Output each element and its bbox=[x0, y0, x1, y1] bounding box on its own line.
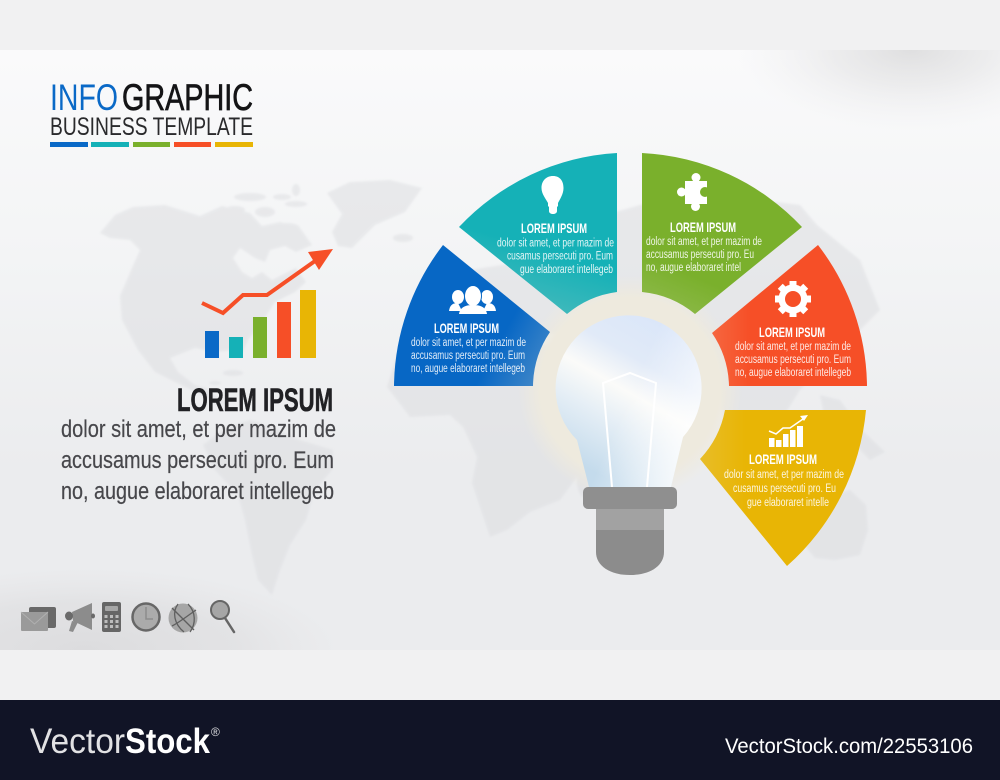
text: dolor sit amet, et per mazim de bbox=[497, 238, 614, 250]
heading: LOREM IPSUM bbox=[521, 220, 587, 236]
icon: clock bbox=[132, 604, 160, 630]
footer logo bbox=[30, 722, 220, 761]
text: no, augue elaboraret intellegeb bbox=[735, 367, 851, 379]
title word: INFOGRAPHIC: INFO bbox=[50, 77, 118, 118]
central light bulb bbox=[556, 315, 702, 575]
footer logo: ® bbox=[211, 725, 220, 739]
text: dolor sit amet, et per mazim de bbox=[646, 236, 762, 248]
text bbox=[497, 238, 614, 276]
footer logo: Vector bbox=[30, 722, 125, 761]
text bbox=[724, 469, 844, 509]
left text block: accusamus persecuti pro. Eum bbox=[61, 447, 334, 474]
text bbox=[411, 337, 526, 375]
footer logo: Stock bbox=[125, 722, 210, 761]
bulb base bbox=[583, 487, 677, 575]
text: accusamus persecuti pro. Eu bbox=[646, 249, 754, 261]
left text block: no, augue elaboraret intellegeb bbox=[61, 478, 334, 505]
filament bbox=[603, 373, 656, 487]
title word: INFOGRAPHIC bbox=[50, 77, 253, 118]
text: no, augue elaboraret intel bbox=[646, 262, 741, 274]
heading: LOREM IPSUM bbox=[434, 320, 499, 336]
bar chart with rising arrow bbox=[202, 249, 333, 358]
colour bars bbox=[50, 142, 253, 147]
bulb glow halo bbox=[518, 276, 742, 500]
icon: calculator bbox=[102, 602, 121, 632]
icon: megaphone bbox=[65, 603, 95, 632]
icon: magnifier bbox=[211, 601, 234, 632]
text: gue elaboraret intellegeb bbox=[520, 264, 613, 276]
icon: globe bbox=[168, 604, 198, 632]
left heading: LOREM IPSUM bbox=[177, 382, 333, 418]
world map bbox=[100, 180, 885, 595]
icon: envelopes bbox=[21, 607, 56, 631]
icon: growth chart bbox=[769, 415, 808, 447]
text: cusamus persecuti pro. Eum bbox=[507, 250, 613, 262]
left text block bbox=[61, 416, 336, 505]
icon: gear bbox=[775, 281, 811, 317]
text bbox=[735, 341, 851, 379]
icon: people bbox=[449, 286, 496, 314]
text: gue elaboraret intelle bbox=[747, 497, 829, 509]
panel: yellow segment bbox=[700, 410, 866, 566]
text: dolor sit amet, et per mazim de bbox=[411, 337, 526, 349]
bulb glass bbox=[556, 315, 702, 487]
panel: red segment bbox=[712, 245, 867, 386]
text: no, augue elaboraret intellegeb bbox=[411, 363, 525, 375]
panel: green segment bbox=[642, 153, 802, 314]
icon: puzzle piece bbox=[677, 173, 710, 211]
text: accusamus persecuti pro. Eum bbox=[735, 354, 851, 366]
left text block: dolor sit amet, et per mazim de bbox=[61, 416, 336, 443]
arrow bbox=[202, 249, 333, 313]
footer image id: VectorStock.com/22553106 bbox=[725, 735, 973, 758]
subtitle: BUSINESS TEMPLATE bbox=[50, 113, 253, 141]
panel: blue segment bbox=[394, 245, 550, 386]
icon: light bulb bbox=[542, 176, 564, 214]
text: dolor sit amet, et per mazim de bbox=[735, 341, 851, 353]
text bbox=[646, 236, 762, 274]
heading: LOREM IPSUM bbox=[749, 451, 817, 467]
title bbox=[50, 77, 253, 147]
heading: LOREM IPSUM bbox=[670, 219, 736, 235]
heading: LOREM IPSUM bbox=[759, 324, 825, 340]
text: cusamus persecuti pro. Eu bbox=[733, 483, 836, 495]
panel: teal segment bbox=[459, 153, 617, 314]
text: dolor sit amet, et per mazim de bbox=[724, 469, 844, 481]
small grey icons bbox=[21, 601, 234, 632]
title word: INFOGRAPHIC: GRAPHIC bbox=[122, 77, 253, 118]
text: accusamus persecuti pro. Eum bbox=[411, 350, 525, 362]
footer band bbox=[0, 700, 1000, 780]
